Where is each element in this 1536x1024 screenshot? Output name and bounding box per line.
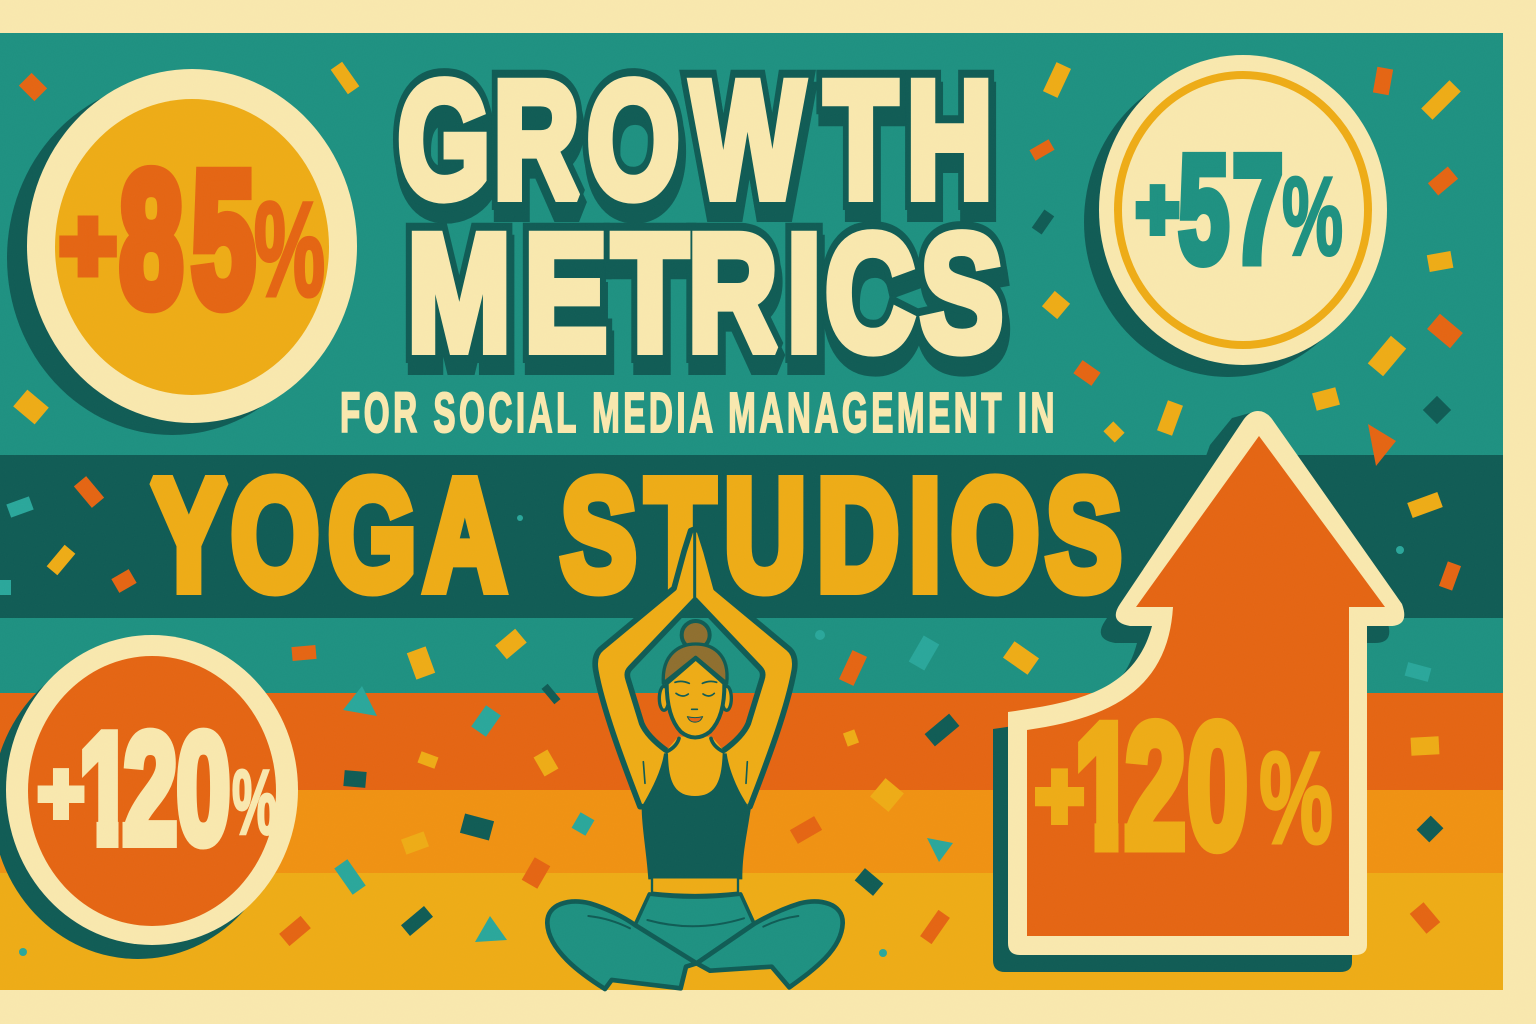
centre line of hands	[690, 532, 699, 598]
ears	[659, 686, 669, 710]
title: GROWTH METRICS: METRICS	[407, 201, 1003, 386]
badge: +85%: +	[60, 190, 116, 302]
hair	[663, 644, 727, 683]
arms and shoulders	[595, 529, 795, 807]
arrow value: 120	[1074, 688, 1248, 885]
underarm marks	[643, 762, 747, 783]
badge: +120% left	[0, 635, 298, 959]
bun	[682, 621, 710, 649]
title: GROWTH METRICS: GROWTH	[397, 47, 993, 233]
arrow value: +	[1036, 743, 1084, 848]
chest	[643, 737, 748, 807]
title: GROWTH METRICS: METRICS	[407, 201, 1003, 386]
neck lines	[667, 738, 723, 752]
left leg	[547, 902, 697, 989]
title: GROWTH METRICS	[397, 47, 1005, 398]
badge: +120% left: %	[232, 752, 277, 854]
arrow value: %	[1259, 724, 1333, 871]
badge: +120% left: 120	[78, 700, 231, 877]
badge: +57%	[1084, 55, 1387, 377]
badge: +57%: +	[1136, 162, 1178, 256]
badge: +57%: %	[1282, 154, 1343, 278]
right leg	[697, 902, 843, 987]
arrow value	[1035, 718, 1332, 854]
brows, eyes, nose and mouth	[675, 681, 717, 709]
subtitle: FOR SOCIAL MEDIA MANAGEMENT IN	[340, 381, 1058, 445]
badge: +85%: %	[254, 176, 325, 324]
badge: +120% left: +	[38, 746, 84, 842]
growth arrow	[993, 411, 1404, 972]
hips	[635, 894, 754, 963]
title: GROWTH METRICS: GROWTH	[399, 59, 995, 245]
waistband	[652, 877, 738, 895]
heading: YOGA STUDIOS: YOGA STUDIOS	[151, 447, 1122, 622]
title: GROWTH METRICS: METRICS	[409, 213, 1005, 398]
badge: +57%: 57	[1178, 124, 1283, 294]
badge: +85%: 85	[120, 134, 255, 346]
badge: +85%	[7, 69, 357, 435]
title: GROWTH METRICS: GROWTH	[397, 47, 993, 233]
tank top	[642, 753, 751, 879]
face	[667, 658, 724, 737]
yoga figure	[547, 529, 843, 989]
